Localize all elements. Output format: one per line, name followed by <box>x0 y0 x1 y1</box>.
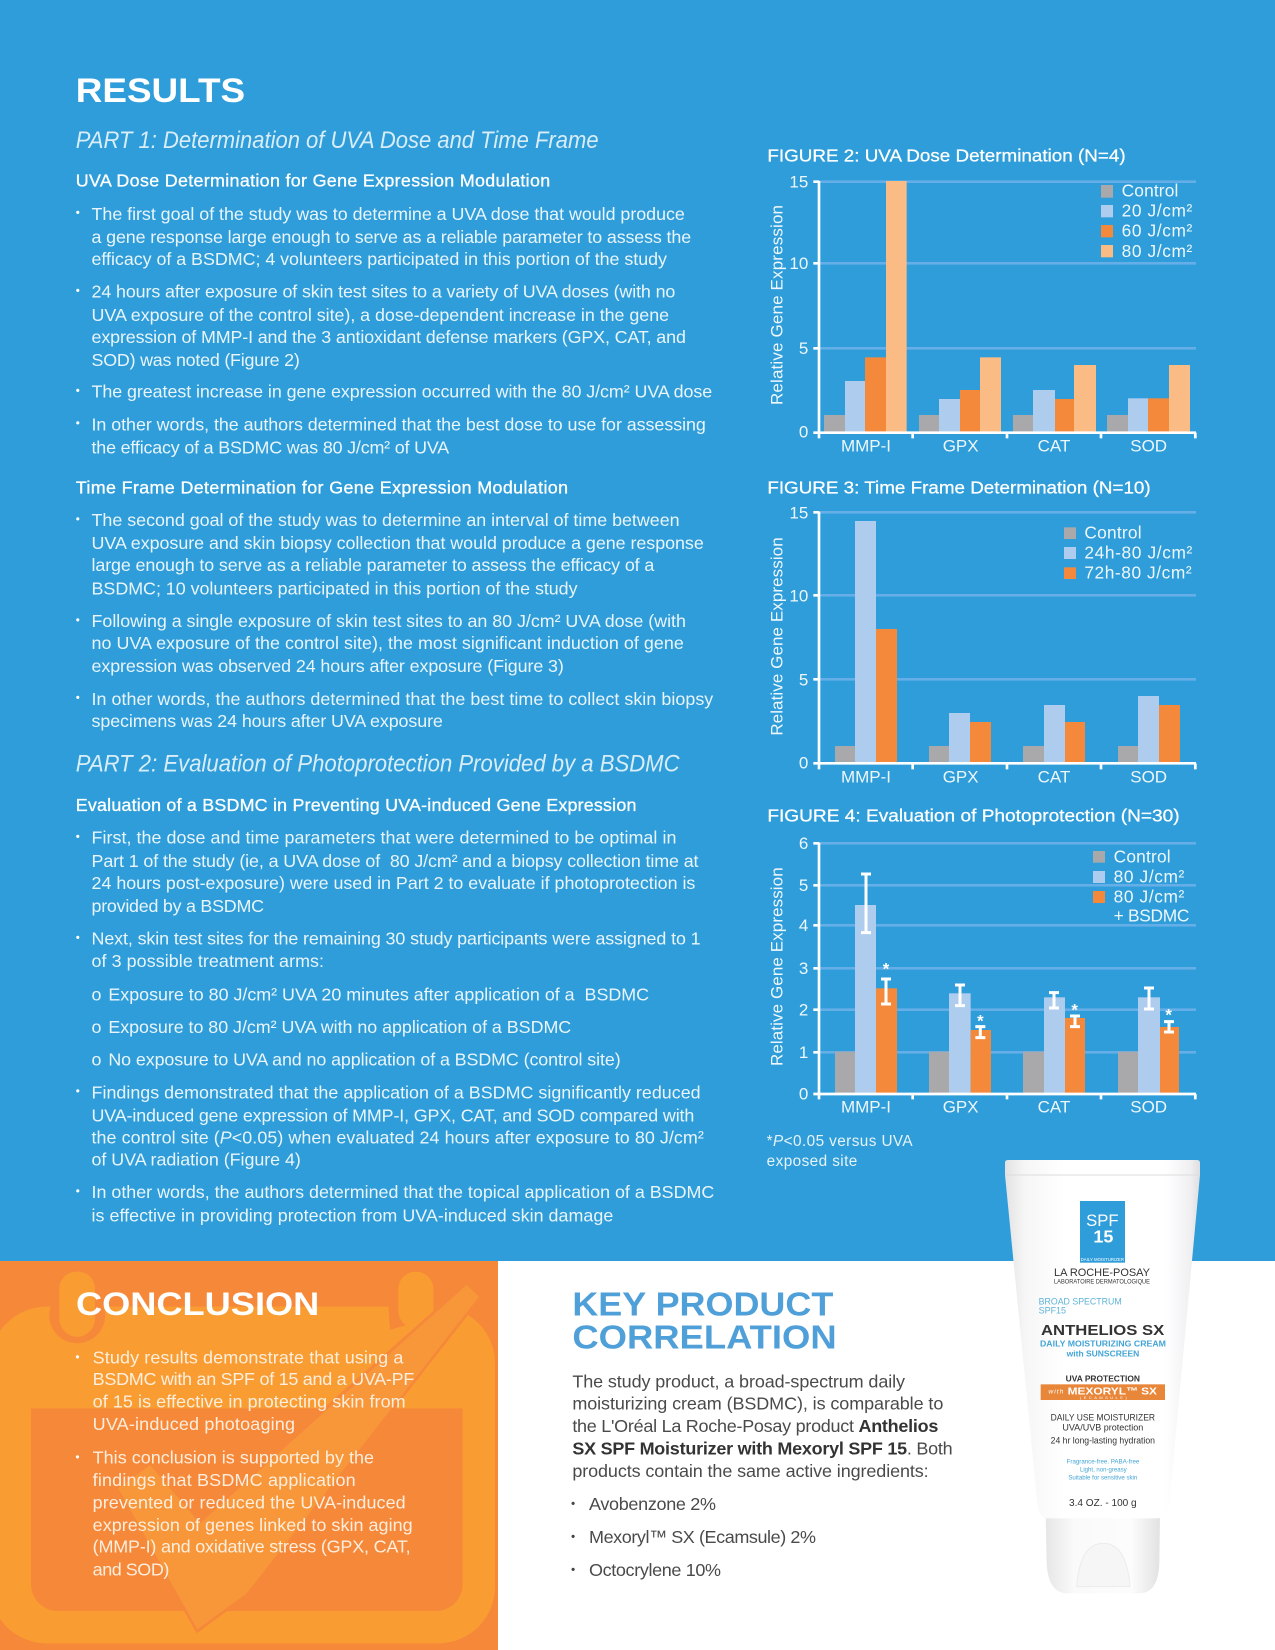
heading: Part 1: PART 1: Determination of UVA Dose and Time Frame <box>76 127 599 154</box>
text block: evaluation bullets: UVA-induced gene expression of MMP-I, GPX, CAT, and SOD compared with <box>92 1105 694 1125</box>
subheading: evaluation: Evaluation of a BSDMC in Preventing UVA-induced Gene Expression <box>76 795 636 815</box>
y axis labels: 4 <box>799 916 808 935</box>
text block: conclusion bullets: and SOD) <box>93 1560 169 1580</box>
figure 2 chart <box>767 146 1196 456</box>
text block: UVA dose bullets: • <box>76 286 80 298</box>
product name: ANTHELIOS SX <box>1041 1323 1165 1339</box>
SPF badge: DAILY MOISTURIZER <box>1081 1257 1124 1262</box>
bars <box>824 181 1190 432</box>
legend <box>1101 181 1193 261</box>
text block: evaluation bullets: Next, skin test sites for the remaining 30 study participants were assigned to 1 <box>92 929 701 949</box>
text block: product description: the L'Oréal La Roche-Posay product Anthelios <box>572 1416 938 1436</box>
x axis labels: SOD <box>1130 437 1167 456</box>
text block: evaluation bullets: o <box>92 1017 102 1037</box>
heading: key product correlation: KEY PRODUCT <box>572 1287 833 1324</box>
text block: conclusion bullets: Study results demonstrate that using a <box>93 1347 403 1367</box>
product claims: UVA/UVB protection <box>1062 1423 1143 1433</box>
text block: evaluation bullets <box>76 828 714 1225</box>
blue background <box>0 0 1275 1261</box>
tube cap <box>1046 1513 1160 1593</box>
text block: evaluation bullets: o <box>92 1050 102 1070</box>
text block: time frame bullets: large enough to serve as a reliable parameter to assess the efficacy of a <box>92 555 654 575</box>
text block: time frame bullets: In other words, the authors determined that the best time to collect skin biopsy <box>92 689 713 709</box>
text block: conclusion bullets: findings that BSDMC application <box>93 1470 356 1490</box>
text block: UVA dose bullets <box>76 204 712 457</box>
y axis labels: 15 <box>789 172 808 191</box>
text block: evaluation bullets: Exposure to 80 J/cm² UVA 20 minutes after application of a BSDMC <box>108 984 649 1004</box>
text block: conclusion bullets <box>75 1347 414 1580</box>
small claims: Light, non-greasy <box>1080 1468 1127 1474</box>
text block: UVA dose bullets: SOD) was noted (Figure 2) <box>92 350 300 370</box>
x axis labels <box>841 437 1167 456</box>
figure 2 title: FIGURE 2: UVA Dose Determination (N=4) <box>767 146 1126 166</box>
y axis labels <box>767 834 808 1104</box>
y axis labels: 1 <box>799 1043 808 1062</box>
list: active ingredients: Octocrylene 10% <box>589 1560 721 1580</box>
text block: time frame bullets: UVA exposure and skin biopsy collection that would produce a gene response <box>92 533 704 553</box>
text block: time frame bullets: Following a single exposure of skin test sites to an 80 J/cm² UVA dose (with <box>92 611 686 631</box>
title: RESULTS: RESULTS <box>76 72 245 110</box>
white lower background <box>0 1261 1275 1650</box>
product name <box>1040 1323 1166 1359</box>
text block: time frame bullets: • <box>76 514 80 526</box>
text block: conclusion bullets: This conclusion is supported by the <box>93 1447 374 1467</box>
UVA protection band: with <box>1048 1388 1064 1395</box>
text block: product description: SX SPF Moisturizer with Mexoryl SPF 15. Both <box>572 1438 953 1458</box>
x axis labels: CAT <box>1038 437 1070 456</box>
significance asterisks: * <box>977 1012 984 1031</box>
text block: UVA dose bullets: a gene response large enough to serve as a reliable parameter to assess the <box>92 227 691 247</box>
heading: conclusion: CONCLUSION <box>76 1285 319 1322</box>
text block: time frame bullets: • <box>76 615 80 627</box>
results column <box>76 72 714 1225</box>
text block: evaluation bullets: In other words, the authors determined that the topical application of a BSDMC <box>92 1182 714 1202</box>
product claims: DAILY USE MOISTURIZER <box>1051 1413 1155 1423</box>
y axis labels: 5 <box>799 339 808 358</box>
text block: time frame bullets <box>76 510 713 731</box>
legend <box>1093 847 1189 926</box>
text block: evaluation bullets: • <box>76 933 80 945</box>
heading: Part 2: PART 2: Evaluation of Photoprotection Provided by a BSDMC <box>76 751 680 778</box>
x axis labels: CAT <box>1038 1098 1070 1117</box>
text block: evaluation bullets: Exposure to 80 J/cm² UVA with no application of a BSDMC <box>108 1017 571 1037</box>
legend: 72h-80 J/cm² <box>1084 562 1192 582</box>
text block: evaluation bullets: 24 hours post-exposure) were used in Part 2 to evaluate if photoprotection is <box>92 873 695 893</box>
y axis labels: 10 <box>789 254 808 273</box>
SPF badge: 15 <box>1093 1226 1113 1246</box>
icon: calendar with check mark <box>0 1272 495 1643</box>
y axis labels: 5 <box>799 876 808 895</box>
x axis labels: MMP-I <box>841 437 891 456</box>
text block: evaluation bullets: • <box>76 1186 80 1198</box>
broad spectrum label: BROAD SPECTRUM <box>1039 1296 1122 1306</box>
text block: UVA dose bullets: UVA exposure of the control site), a dose-dependent increase in the gene <box>92 305 669 325</box>
legend: 80 J/cm² <box>1114 887 1185 907</box>
y axis labels: 15 <box>789 503 808 522</box>
text block: UVA dose bullets: efficacy of a BSDMC; 4 volunteers participated in this portion of the study <box>92 249 667 269</box>
text block: conclusion bullets: BSDMC with an SPF of 15 and a UVA-PF <box>93 1369 414 1389</box>
y axis labels: 3 <box>799 959 808 978</box>
panel: key product correlation <box>571 1287 953 1580</box>
text block: time frame bullets: • <box>76 693 80 705</box>
y axis labels: 0 <box>799 753 808 772</box>
y axis labels <box>767 172 808 441</box>
UVA protection band: (ECAMSULE) <box>1080 1395 1127 1400</box>
text block: conclusion bullets: expression of genes linked to skin aging <box>93 1515 413 1535</box>
figure 3 chart <box>767 477 1196 787</box>
y axis labels: Relative Gene Expression <box>767 867 786 1066</box>
panel: conclusion <box>0 1261 498 1650</box>
text block: evaluation bullets: First, the dose and time parameters that were determined to be optimal in <box>92 828 676 848</box>
small claims: Fragrance-free. PABA-free <box>1067 1459 1140 1465</box>
text block: time frame bullets: specimens was 24 hours after UVA exposure <box>92 711 443 731</box>
list: active ingredients: • <box>571 1563 575 1577</box>
y axis labels: 10 <box>789 586 808 605</box>
text block: conclusion bullets: • <box>75 1350 80 1364</box>
product name: DAILY MOISTURIZING CREAM <box>1040 1339 1166 1349</box>
y axis labels: 0 <box>799 1085 808 1104</box>
y axis labels: 0 <box>799 422 808 441</box>
text block: conclusion bullets: prevented or reduced the UVA-induced <box>93 1492 406 1512</box>
text block: evaluation bullets: Findings demonstrated that the application of a BSDMC significantly reduced <box>92 1082 701 1102</box>
text block: time frame bullets: The second goal of the study was to determine an interval of time between <box>92 510 680 530</box>
significance asterisks <box>883 960 1172 1031</box>
text block: UVA dose bullets: In other words, the authors determined that the best dose to use for assessing <box>92 414 706 434</box>
significance asterisks: * <box>1165 1006 1172 1025</box>
text block: conclusion bullets: • <box>75 1450 80 1464</box>
legend: 80 J/cm² <box>1122 241 1193 261</box>
small claims: Suitable for sensitive skin <box>1068 1475 1137 1481</box>
x axis labels: MMP-I <box>841 1098 891 1117</box>
x axis labels <box>841 768 1167 787</box>
text block: UVA dose bullets: • <box>76 208 80 220</box>
x axis labels: CAT <box>1038 768 1070 787</box>
text block: evaluation bullets: is effective in providing protection from UVA-induced skin damage <box>92 1205 613 1225</box>
text block: evaluation bullets: the control site (P<0.05) when evaluated 24 hours after exposure to 80 J/cm² <box>92 1128 704 1148</box>
tube body <box>1005 1160 1200 1518</box>
list: active ingredients: Mexoryl™ SX (Ecamsule) 2% <box>589 1527 816 1547</box>
legend: 80 J/cm² <box>1114 867 1185 887</box>
text block: conclusion bullets: UVA-induced photoaging <box>93 1414 295 1434</box>
y axis labels: 2 <box>799 1000 808 1019</box>
heading: key product correlation <box>572 1287 837 1356</box>
figure 4 title: FIGURE 4: Evaluation of Photoprotection (N=30) <box>767 806 1180 826</box>
text block: UVA dose bullets: • <box>76 385 80 397</box>
list: active ingredients: • <box>571 1497 575 1511</box>
text block: UVA dose bullets: expression of MMP-I and the 3 antioxidant defense markers (GPX, CAT, and <box>92 327 686 347</box>
x axis labels: GPX <box>943 437 979 456</box>
UVA protection band <box>1041 1374 1165 1400</box>
SPF badge <box>1080 1201 1125 1263</box>
text block: product description: The study product, a broad-spectrum daily <box>572 1371 905 1391</box>
text block: UVA dose bullets: The first goal of the study was to determine a UVA dose that would produce <box>92 204 685 224</box>
legend: Control <box>1114 847 1171 867</box>
small claims <box>1067 1459 1140 1481</box>
product name: with SUNSCREEN <box>1066 1349 1139 1359</box>
text block: time frame bullets: expression was observed 24 hours after exposure (Figure 3) <box>92 656 564 676</box>
text block: evaluation bullets: provided by a BSDMC <box>92 896 264 916</box>
text block: evaluation bullets: No exposure to UVA and no application of a BSDMC (control site) <box>108 1050 621 1070</box>
footnote: *P<0.05 versus UVA <box>767 1133 913 1150</box>
subheading: time frame: Time Frame Determination for Gene Expression Modulation <box>76 477 568 497</box>
text block: UVA dose bullets: The greatest increase in gene expression occurred with the 80 J/cm² UVA dose <box>92 382 712 402</box>
legend <box>1064 522 1193 582</box>
x axis labels: SOD <box>1130 768 1167 787</box>
legend: + BSDMC <box>1114 906 1189 926</box>
footnote: exposed site <box>767 1153 857 1170</box>
text block: evaluation bullets: • <box>76 1086 80 1098</box>
bars <box>835 905 1179 1093</box>
text block: UVA dose bullets: 24 hours after exposure of skin test sites to a variety of UVA doses (with no <box>92 282 675 302</box>
x axis labels: MMP-I <box>841 768 891 787</box>
y axis labels: Relative Gene Expression <box>767 205 786 405</box>
text block: UVA dose bullets: • <box>76 418 80 430</box>
brand name: LABORATOIRE DERMATOLOGIQUE <box>1054 1278 1150 1285</box>
brand name <box>1054 1267 1150 1285</box>
broad spectrum label: SPF15 <box>1039 1305 1066 1315</box>
y axis labels: Relative Gene Expression <box>767 537 786 736</box>
legend: Control <box>1122 181 1178 201</box>
text block: product description <box>572 1371 953 1481</box>
list: active ingredients <box>571 1494 816 1580</box>
text block: product description: moisturizing cream (BSDMC), is comparable to <box>572 1394 943 1414</box>
y axis labels <box>767 503 808 772</box>
text block: UVA dose bullets: the efficacy of a BSDMC was 80 J/cm² of UVA <box>92 437 449 457</box>
UVA protection band: UVA PROTECTION <box>1066 1374 1140 1384</box>
product tube <box>1005 1160 1200 1593</box>
broad spectrum label <box>1039 1296 1122 1315</box>
text block: time frame bullets: BSDMC; 10 volunteers participated in this portion of the study <box>92 578 578 598</box>
legend: 20 J/cm² <box>1122 201 1193 221</box>
footnote <box>767 1133 913 1170</box>
text block: evaluation bullets: • <box>76 832 80 844</box>
error bars <box>861 874 1174 1038</box>
net weight: 3.4 OZ. - 100 g <box>1069 1498 1137 1509</box>
x axis labels <box>841 1098 1167 1117</box>
bars <box>835 521 1180 762</box>
figure 4 chart <box>767 806 1196 1170</box>
text block: time frame bullets: no UVA exposure of the control site), the most significant induction of gene <box>92 633 684 653</box>
x axis labels: GPX <box>943 768 979 787</box>
brand name: LA ROCHE-POSAY <box>1054 1267 1150 1279</box>
text block: product description: products contain the same active ingredients: <box>572 1461 929 1481</box>
text block: evaluation bullets: of 3 possible treatment arms: <box>92 951 324 971</box>
text block: evaluation bullets: Part 1 of the study (ie, a UVA dose of 80 J/cm² and a biopsy collection time at <box>92 851 699 871</box>
UVA protection band: MEXORYL™ SX <box>1068 1386 1157 1397</box>
significance asterisks: * <box>1071 1001 1078 1020</box>
legend: 24h-80 J/cm² <box>1084 542 1193 562</box>
figure 3 title: FIGURE 3: Time Frame Determination (N=10) <box>767 477 1151 497</box>
subheading: UVA dose: UVA Dose Determination for Gene Expression Modulation <box>76 171 550 191</box>
product claims: 24 hr long-lasting hydration <box>1051 1435 1155 1445</box>
text block: conclusion bullets: (MMP-I) and oxidative stress (GPX, CAT, <box>93 1537 411 1557</box>
text block: evaluation bullets: of UVA radiation (Figure 4) <box>92 1150 301 1170</box>
legend: Control <box>1084 522 1142 542</box>
text block: conclusion bullets: of 15 is effective in protecting skin from <box>93 1392 406 1412</box>
SPF badge: SPF <box>1086 1211 1119 1230</box>
text block: evaluation bullets: o <box>92 984 102 1004</box>
x axis labels: GPX <box>943 1098 979 1117</box>
x axis labels: SOD <box>1130 1098 1167 1117</box>
product claims <box>1051 1413 1155 1445</box>
y axis labels: 5 <box>799 670 808 689</box>
y axis labels: 6 <box>799 834 808 853</box>
list: active ingredients: • <box>571 1530 575 1544</box>
list: active ingredients: Avobenzone 2% <box>589 1494 716 1514</box>
heading: key product correlation: CORRELATION <box>572 1319 837 1356</box>
legend: 60 J/cm² <box>1122 221 1193 241</box>
significance asterisks: * <box>883 960 890 979</box>
